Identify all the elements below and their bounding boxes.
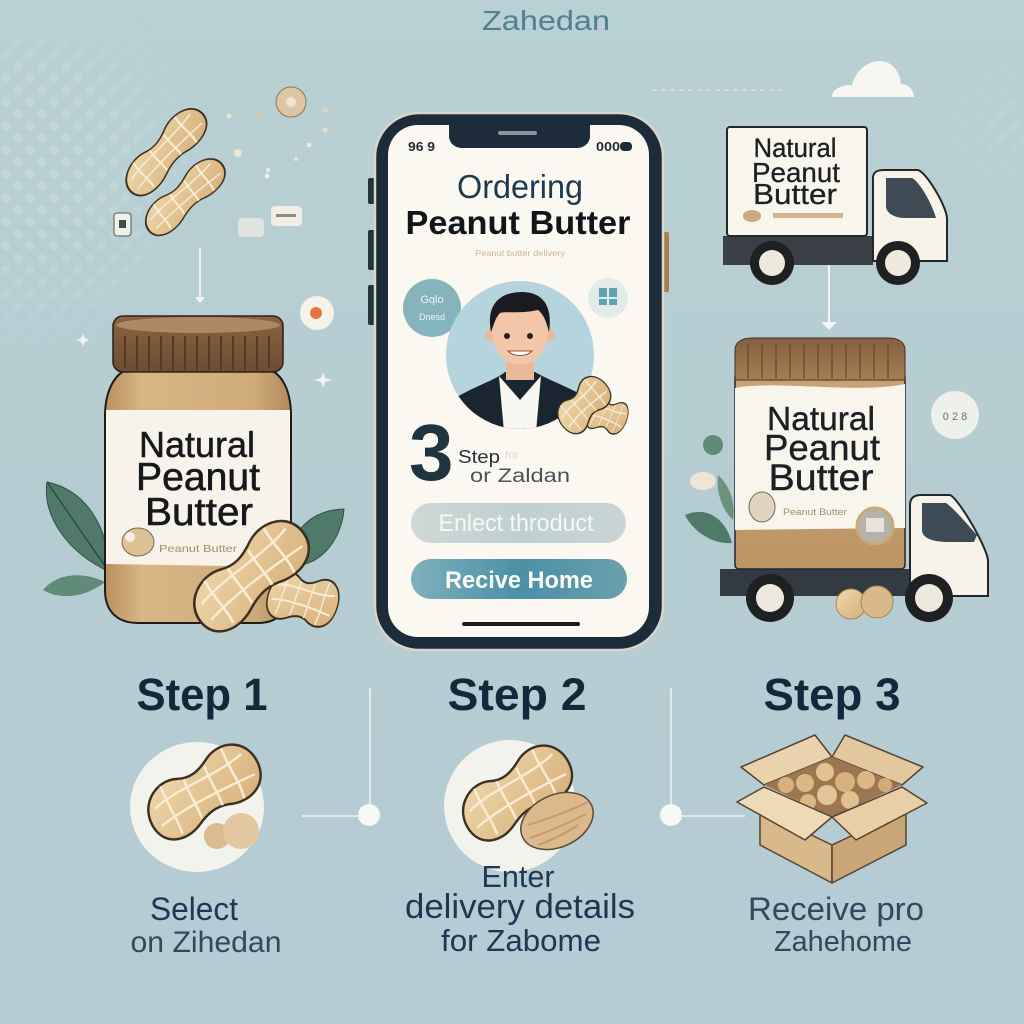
avatar portrait (446, 281, 594, 432)
illustration: peanut butter jar left (105, 316, 291, 623)
illustration: top delivery truck: Butter (753, 179, 837, 211)
jar label: Butter (768, 457, 874, 498)
jar label: Butter (145, 491, 253, 534)
icon: step 1 peanut (130, 735, 273, 872)
jar label (735, 384, 905, 544)
phone heading (406, 168, 631, 258)
truck wheels (746, 574, 953, 622)
speech bubble left: Gqlo (420, 294, 444, 306)
speech bubble left (403, 279, 461, 337)
illustration: right leaves (685, 435, 734, 543)
step count: or Zaldan (470, 466, 570, 487)
jar label: Natural (139, 424, 255, 465)
speech bubble left: Dnesd (419, 312, 445, 322)
arrow: truck to jar (821, 265, 837, 330)
heading: Step 2: Step 2 (448, 669, 586, 720)
button: receive home (411, 559, 627, 599)
phone heading: Peanut Butter (406, 204, 631, 241)
jar label: Peanut Butter (783, 507, 847, 517)
step count: 3 (409, 408, 454, 497)
connector: step 2 to 3 (660, 688, 745, 826)
truck wheels (750, 241, 920, 285)
button: receive home: Recive Home (445, 567, 593, 594)
peanut on phone (549, 370, 632, 440)
button: select product (411, 503, 626, 543)
truck cab (873, 170, 947, 261)
icon: orange badge (300, 296, 334, 330)
button: select product: Enlect throduct (438, 510, 594, 537)
illustration: peanuts front of left jar (178, 509, 344, 642)
step count (409, 408, 570, 497)
jar label: Natural (767, 400, 875, 437)
icon: cloud (832, 61, 914, 97)
text: step 2 caption: delivery details (405, 888, 635, 926)
illustration: top delivery truck: Natural (754, 133, 836, 163)
jar label: Peanut Butter (159, 544, 238, 555)
icon: step 3 open box (737, 735, 927, 883)
illustration: leaves left jar (43, 482, 344, 596)
step count: Step (458, 447, 500, 467)
truck cab (910, 495, 988, 596)
text: step 3 caption: Receive pro (748, 891, 924, 927)
almond (512, 781, 602, 861)
illustration: top delivery truck (723, 127, 947, 285)
jar lid (735, 338, 905, 380)
heading: Step 3: Step 3 (764, 669, 900, 720)
box back flaps (741, 735, 832, 785)
truck box (727, 127, 867, 236)
icon: note bubble right: 0 2 8 (943, 411, 967, 423)
jar label: Peanut (136, 456, 260, 499)
phone notch (449, 125, 590, 148)
text: step 2 caption: Enter (482, 859, 554, 894)
phone heading: Peanut butter delivery (475, 249, 565, 258)
phone status bar: 96 9 (408, 139, 435, 154)
icon: floating peanuts top left (114, 87, 328, 242)
jar lid (113, 316, 283, 372)
connector: step 1 to 2 (302, 688, 380, 826)
text: step 2 caption (405, 859, 635, 958)
phone home bar (462, 622, 580, 626)
phone status bar (408, 139, 632, 154)
truck chassis (723, 236, 873, 265)
icon: note bubble right (931, 391, 979, 439)
illustration: peanut butter jar right (735, 338, 905, 569)
text: step 3 caption: Zahehome (774, 926, 912, 958)
jar label: Peanut (764, 427, 880, 468)
jar label (106, 410, 290, 567)
illustration: top delivery truck: Peanut (752, 157, 840, 188)
decorative dash (652, 89, 785, 91)
text: step 1 caption: Select (150, 891, 238, 927)
icon: small peanuts by truck (836, 586, 893, 619)
text: step 3 caption (748, 891, 924, 958)
phone heading: Ordering (457, 168, 583, 205)
text: step 1 caption: on Zihedan (130, 926, 282, 959)
icon: step 2 peanut and almond (444, 736, 602, 872)
step count: for (505, 448, 519, 462)
arrow: peanuts to jar (195, 248, 205, 303)
illustration: bottom truck with jar (720, 495, 988, 622)
text: step 1 caption (130, 891, 282, 959)
icon: sparkle (77, 334, 332, 388)
panel: phone (368, 113, 669, 650)
text: step 2 caption: for Zabome (441, 923, 601, 958)
speech bubble right (588, 278, 628, 318)
title: Zahedan: Zahedan (482, 5, 610, 36)
truck chassis (720, 569, 912, 596)
heading: Step 1: Step 1 (136, 669, 268, 720)
phone status bar: 000 (596, 139, 620, 154)
box opening with nuts (764, 757, 902, 817)
